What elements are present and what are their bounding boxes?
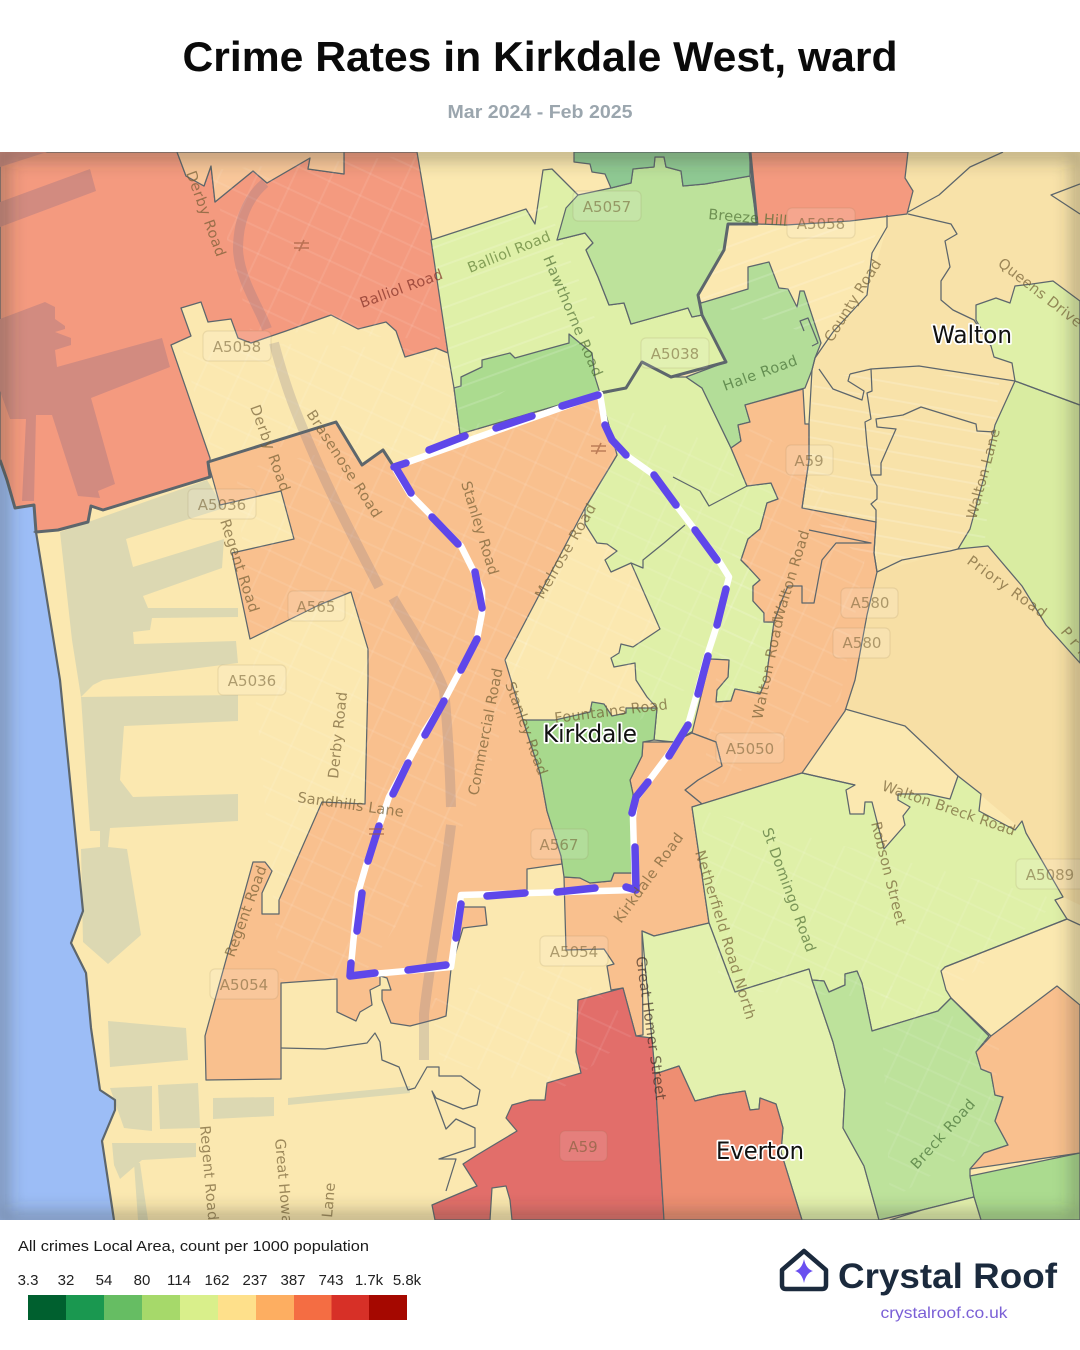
road name labels: County Road [822, 257, 885, 345]
area: Stanley Road ward orange [205, 393, 617, 1080]
legend scale values: 3.3 [18, 1272, 38, 1289]
logo url: crystalroof.co.uk [880, 1305, 1009, 1322]
legend scale values: 162 [204, 1272, 230, 1289]
legend scale values: 54 [96, 1272, 112, 1289]
area: Breck Road green [812, 971, 1008, 1220]
road number shields: A565 [297, 598, 335, 616]
area: Walton Road orange [685, 389, 877, 804]
road name labels: Derby Road [246, 403, 292, 494]
road number shields: A59 [794, 452, 824, 470]
road name labels: Breck Road [908, 1097, 979, 1173]
area: Hale Road green [686, 262, 821, 448]
road number shields: A5036 [228, 672, 276, 690]
road name labels: Netherfield Road North [691, 848, 758, 1021]
legend scale values: 5.8k [393, 1272, 422, 1289]
road name labels: Walton Road [750, 618, 787, 721]
road name labels: Sandhills Lane [296, 790, 405, 821]
area: St Domingo light green [692, 773, 1067, 1031]
area: red top right [750, 152, 913, 225]
road name labels: Lane [320, 1182, 339, 1218]
area: A5057 green [557, 157, 757, 324]
road name labels [182, 169, 1080, 1239]
area: Queens Drive green [976, 281, 1080, 405]
road name labels: Breeze Hill [708, 207, 788, 230]
road number shields: A5036 [198, 496, 246, 514]
thin boundary lines [281, 152, 1080, 1191]
legend scale values: 80 [134, 1272, 150, 1289]
road number shields: A5089 [1026, 866, 1074, 884]
area: Everton orange-red [655, 1066, 802, 1220]
road number shields [188, 191, 1080, 1161]
legend scale values: 743 [318, 1272, 344, 1289]
road name labels: Regent Road [216, 517, 261, 614]
area: south-east orange [970, 986, 1080, 1169]
road name labels: Hawthorne Road [539, 253, 605, 379]
area: Kirkdale Road orange [564, 733, 722, 1036]
legend scale values [18, 1272, 422, 1289]
road number shields: A580 [851, 594, 889, 612]
rail station icons [294, 240, 606, 834]
road number shields: A5054 [550, 943, 598, 961]
logo: Crystal Roof [782, 1251, 1057, 1322]
road name labels: Balliol Road [358, 267, 445, 312]
road number shields: A5058 [797, 215, 845, 233]
area: red A59 [432, 988, 664, 1220]
area: Walton Lane green [958, 381, 1080, 663]
road name labels: Regent Road [196, 1125, 220, 1221]
road name labels: Priory Road [964, 553, 1049, 621]
place label: Kirkdale: Kirkdale [543, 720, 637, 748]
road name labels: Commercial Road [466, 667, 507, 797]
area: green south of Balliol [454, 334, 600, 434]
road name labels: Robson Street [867, 820, 908, 927]
legend title: All crimes Local Area, count per 1000 population [18, 1238, 369, 1255]
sea [0, 460, 115, 1220]
orange notch north [177, 152, 344, 202]
dock basins [60, 480, 410, 1220]
white boundary line [350, 394, 729, 976]
road name labels: Derby Road [182, 169, 228, 259]
road name labels: Derby Road [326, 691, 351, 779]
legend colour bar [28, 1295, 407, 1320]
road name labels: Great Homer Street [632, 955, 668, 1101]
road name labels: Regent Road [223, 864, 271, 959]
railway lines [238, 183, 451, 1060]
road name labels: Walton Road [771, 529, 813, 623]
legend scale values: 237 [242, 1272, 268, 1289]
area: south-east green [970, 1153, 1080, 1220]
logo wordmark: Crystal Roof [838, 1257, 1057, 1296]
road number shields: A580 [843, 634, 881, 652]
legend scale values: 114 [167, 1272, 191, 1289]
road name labels: St Domingo Road [758, 826, 818, 954]
street texture [180, 155, 1060, 1200]
road number shields: A5058 [213, 338, 261, 356]
road name labels: Stanley Road [501, 680, 550, 777]
legend scale values: 387 [280, 1272, 306, 1289]
road name labels: Fountains Road [554, 697, 669, 727]
road number shields: A567 [540, 836, 578, 854]
legend scale values: 1.7k [355, 1272, 384, 1289]
title: Crime Rates in Kirkdale West, ward [182, 33, 898, 80]
purple dashes [350, 395, 726, 976]
road name labels: Walton Breck Road [880, 779, 1017, 839]
area: Balliol light green [431, 169, 726, 434]
place label: Everton: Everton [716, 1137, 804, 1165]
tan areas [802, 152, 1080, 660]
road name labels: Hale Road [721, 353, 800, 395]
road name labels: Walton Lane [964, 427, 1004, 521]
road number shields: A5050 [726, 740, 774, 758]
area: Great Homer light green [642, 923, 879, 1220]
subtitle: date range: Mar 2024 - Feb 2025 [448, 101, 632, 122]
road name labels: Stanley Road [457, 479, 501, 577]
legend scale values: 32 [58, 1272, 74, 1289]
road number shields: A59 [568, 1138, 598, 1156]
road number shields: A5054 [220, 976, 268, 994]
road number shields: A5038 [651, 345, 699, 363]
road name labels: Balliol Road [466, 229, 553, 277]
legend [18, 1238, 422, 1320]
area: Kirkdale green [523, 702, 657, 883]
icon: house with star [782, 1251, 826, 1289]
road number shields: A5057 [583, 198, 631, 216]
dark docks over red area [0, 152, 170, 501]
area: dark green top [574, 152, 750, 188]
ward boundary: Kirkdale West [350, 394, 729, 976]
road name labels: Great Howard [271, 1138, 296, 1239]
area: north-west high crime [0, 152, 448, 532]
road name labels: Brasenose Road [303, 407, 384, 521]
road name labels: Melrose Road [533, 501, 600, 602]
thick district boundary [0, 152, 757, 1220]
area: bottom pale green [890, 1197, 981, 1220]
road name labels: Kirkdale Road [611, 830, 687, 926]
place label: Walton: Walton [932, 321, 1012, 349]
area: central light green [585, 362, 778, 742]
